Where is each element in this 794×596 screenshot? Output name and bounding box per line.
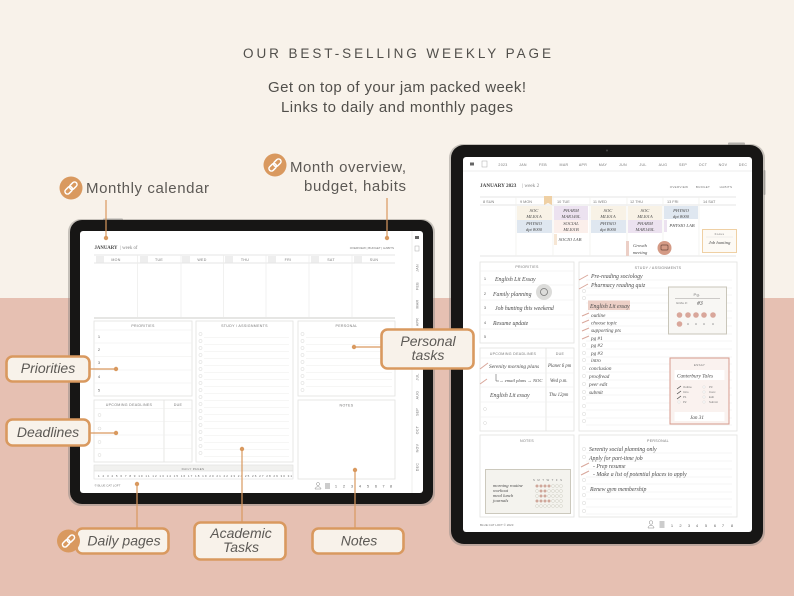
right footer: 4 — [696, 523, 699, 528]
callout: academic tasks: Tasks — [223, 539, 259, 555]
left screen — [80, 231, 423, 493]
right week calendar: MAR140L — [635, 227, 655, 232]
right personal panel: Serenity social planning only — [589, 447, 657, 453]
right week calendar: 13 FRI — [667, 200, 678, 204]
left notes panel: NOTES — [340, 404, 354, 408]
subtitle — [268, 79, 526, 116]
right footer: 6 — [714, 523, 717, 528]
left page title: JANUARY — [94, 246, 118, 251]
right week calendar: PHYSIO — [672, 208, 690, 213]
right top links: OVERVIEW — [670, 185, 688, 189]
left priorities panel: 4 — [98, 374, 101, 379]
habit tracker card — [486, 470, 570, 514]
right week calendar: 12 THU — [630, 200, 643, 204]
right week calendar: PHYSIO — [599, 221, 617, 226]
left week calendar: SAT — [327, 258, 335, 262]
callout: monthly calendar — [60, 176, 209, 240]
right study panel — [579, 262, 737, 431]
left week calendar: THU — [241, 258, 249, 262]
left week calendar — [94, 255, 395, 319]
right priorities panel: English Lit Essay — [494, 277, 536, 283]
right study panel: pg #3 — [590, 351, 603, 357]
left priorities panel: 5 — [98, 388, 101, 392]
right week calendar: MLI01A — [525, 214, 542, 219]
left daily pages strip: 1 2 3 4 5 6 7 8 9 10 11 12 13 14 15 16 17 18 19 20 21 22 23 24 25 26 27 28 29 30 31 — [98, 474, 292, 478]
left daily pages strip: DAILY PAGES — [182, 467, 204, 471]
right study panel: pg #1 — [590, 336, 603, 342]
right personal panel: Apply for part-time job — [588, 455, 643, 462]
left week calendar: TUE — [155, 258, 163, 262]
page goal card: Pg. — [694, 292, 700, 297]
callout: academic tasks — [194, 447, 286, 560]
left month tabs — [415, 236, 420, 471]
essay card: P1 — [683, 395, 687, 399]
left priorities panel: 3 — [98, 360, 101, 365]
left month tabs: SEP — [416, 408, 420, 416]
callout: deadlines — [6, 420, 118, 446]
left month tabs: APR — [416, 318, 420, 326]
right nav bar: SEP — [679, 163, 687, 167]
left footer: 6 — [375, 484, 378, 488]
right footer: 7 — [722, 523, 725, 528]
right week calendar: 8 SUN — [483, 200, 494, 204]
left month tabs: NOV — [416, 443, 420, 452]
page goal card: #3 — [697, 301, 703, 307]
left priorities panel — [94, 321, 192, 396]
right week calendar: 9 MON — [520, 200, 532, 204]
left footer: © BLUE CAT LOFT — [94, 484, 121, 488]
page goal card — [668, 287, 726, 334]
right study panel: conclusion — [589, 366, 612, 372]
sticky note: Focus — [715, 232, 725, 236]
right deadlines panel — [480, 348, 574, 431]
left deadlines panel: DUE — [174, 403, 183, 407]
left study panel: STUDY / ASSIGNMENTS — [221, 324, 268, 328]
right week calendar: 10 TUE — [557, 200, 570, 204]
left week calendar: FRI — [285, 258, 291, 262]
habit tracker card: meal lunch — [493, 493, 514, 498]
left tablet — [68, 218, 435, 506]
left month tabs: JAN — [416, 264, 420, 272]
right study panel: English Lit essay — [589, 304, 630, 310]
right priorities panel: 2 — [484, 291, 487, 296]
right week calendar: SOC — [641, 208, 650, 213]
left month tabs: AUG — [416, 391, 420, 399]
left personal panel — [298, 321, 395, 396]
essay card: Submit — [709, 400, 718, 404]
essay card — [670, 358, 729, 424]
right deadlines panel: Planet 6 pm — [547, 364, 572, 369]
right week calendar: SOC — [530, 208, 539, 213]
heading: OUR BEST-SELLING WEEKLY PAGE — [243, 46, 551, 61]
right week calendar: dpt 8000 — [526, 227, 543, 232]
right tablet — [449, 142, 766, 546]
right deadlines panel: Thu 12pm — [549, 393, 569, 398]
right priorities panel: Family planning — [492, 292, 532, 298]
right footer: 3 — [688, 523, 691, 528]
essay card: Canterbury Tales — [677, 374, 713, 380]
left daily pages strip — [94, 465, 293, 479]
callout: priorities: Priorities — [21, 360, 75, 376]
right week calendar: SOCIO LAB — [559, 237, 582, 242]
essay card: P2 — [683, 400, 687, 404]
right personal panel — [579, 435, 737, 517]
left priorities panel: PRIORITIES — [131, 324, 155, 328]
right top links: BUDGET — [696, 185, 710, 189]
essay card: ESSAY — [694, 363, 705, 367]
callout: month overview: Month overview, — [290, 159, 406, 176]
right deadlines panel: → email plans → NOC — [499, 378, 543, 383]
right study panel: submit — [589, 390, 603, 396]
callout: priorities — [6, 356, 118, 382]
icon: link — [60, 176, 82, 200]
bookmark — [544, 196, 552, 205]
right footer: 2 — [679, 523, 682, 528]
meeting icon — [658, 241, 672, 255]
callout: month overview — [264, 154, 406, 240]
left month tabs: MAR — [416, 299, 420, 308]
left priorities panel: 2 — [98, 347, 101, 352]
right deadlines panel: English Lit essay — [489, 393, 530, 399]
right nav bar: JUL — [639, 163, 647, 167]
right week calendar: PHYSIO LAB — [668, 223, 695, 228]
right priorities panel: 3 — [484, 305, 487, 310]
habit tracker card: morning routine — [493, 483, 523, 488]
right nav bar: NOV — [719, 163, 728, 167]
right personal panel: - Make a list of potential places to apply — [593, 471, 687, 478]
right week calendar: MLI01A — [636, 214, 653, 219]
left footer — [94, 482, 393, 489]
right page title — [480, 183, 540, 189]
callout: monthly calendar: Monthly calendar — [86, 180, 209, 197]
left priorities panel: 1 — [98, 334, 101, 339]
subtitle: Get on top of your jam packed week! — [268, 79, 526, 96]
right study panel: intro — [591, 358, 601, 364]
right week calendar: PHARM — [562, 208, 580, 213]
left footer: 3 — [351, 484, 354, 488]
right study panel: proofread — [588, 373, 610, 380]
left deadlines panel: UPCOMING DEADLINES — [106, 403, 153, 407]
essay card: Jan 31 — [690, 415, 704, 421]
left page title — [94, 246, 138, 251]
right priorities panel: Job hunting this weekend — [495, 306, 554, 312]
callout: academic tasks: Academic — [209, 525, 272, 541]
left footer: 5 — [367, 484, 370, 488]
right study panel: peer edit — [588, 382, 608, 388]
right priorities panel: Resume update — [492, 321, 529, 327]
right top links — [670, 185, 732, 189]
callout: notes — [312, 468, 404, 554]
right week calendar: meeting — [633, 250, 648, 255]
right page title: JANUARY 2023 — [480, 183, 517, 189]
right nav bar: MAR — [560, 163, 569, 167]
right deadlines panel: Serenity morning plans — [489, 364, 539, 370]
right screen — [463, 157, 752, 532]
left page title: | week of — [120, 246, 138, 251]
right footer — [480, 521, 734, 528]
right deadlines panel: DUE — [556, 352, 565, 356]
right nav bar — [463, 161, 752, 171]
left month tabs: DEC — [416, 463, 420, 471]
callout: personal tasks — [352, 330, 474, 368]
left month tabs: MAY — [416, 335, 420, 344]
right study panel: Pre-reading sociology — [590, 274, 643, 280]
right nav bar: APR — [579, 163, 587, 167]
right week calendar: Growth — [633, 243, 648, 248]
left week calendar: SUN — [370, 258, 378, 262]
right top links: HABITS — [720, 185, 732, 189]
right study panel: STUDY / ASSIGNMENTS — [635, 266, 682, 270]
right study panel: Pharmacy reading quiz — [590, 283, 646, 289]
right week calendar: 11 WED — [593, 200, 607, 204]
right deadlines panel: Wed p.m. — [550, 379, 568, 384]
left footer: 7 — [382, 484, 385, 488]
callout: notes: Notes — [341, 532, 377, 548]
right nav bar: JUN — [619, 163, 627, 167]
right footer: 5 — [705, 523, 708, 528]
left week calendar: WED — [197, 258, 207, 262]
left week calendar: MON — [111, 258, 121, 262]
left footer: 2 — [343, 484, 346, 488]
left deadlines panel — [94, 400, 192, 462]
right footer: BLUE CAT LOFT © 2023 — [480, 523, 514, 527]
left month tabs: FEB — [416, 282, 420, 290]
right week calendar: dpt 8000 — [673, 214, 690, 219]
right nav bar: FEB — [539, 163, 547, 167]
essay card: Conc — [709, 390, 716, 394]
right week calendar — [480, 196, 736, 256]
clock icon — [536, 284, 552, 300]
right study panel: supporting pts — [591, 328, 621, 334]
right personal panel: - Prep resume — [593, 464, 626, 470]
essay card: Edit — [709, 395, 714, 399]
icon: link — [57, 530, 80, 552]
right priorities panel: 4 — [484, 320, 487, 325]
right week calendar: PHARM — [636, 221, 654, 226]
callout: personal tasks: tasks — [412, 347, 444, 363]
habit tracker card: workout — [493, 488, 509, 493]
right nav bar: OCT — [699, 163, 708, 167]
right footer: 1 — [671, 523, 674, 528]
left footer: 4 — [359, 484, 362, 488]
right nav bar: 2023 — [498, 163, 508, 167]
left footer: 8 — [390, 484, 393, 488]
right personal panel: Renew gym membership — [589, 487, 646, 493]
left month tabs: JUN — [416, 354, 420, 362]
right study panel: outline — [591, 313, 606, 319]
right week calendar: SOCIAL — [563, 221, 579, 226]
right nav bar: MAY — [599, 163, 608, 167]
habit tracker card: S M T W T F S — [533, 478, 562, 482]
callout: personal tasks: Personal — [400, 333, 457, 349]
callout: daily pages — [57, 482, 168, 554]
left notes panel — [298, 400, 395, 479]
right week calendar: SOC — [604, 208, 613, 213]
left footer: 1 — [335, 484, 338, 488]
left month tabs: OCT — [416, 425, 420, 434]
right week calendar: MLI01B — [562, 227, 579, 232]
right notes panel — [480, 435, 574, 517]
right deadlines panel: UPCOMING DEADLINES — [490, 352, 537, 356]
right week calendar: MLI01A — [599, 214, 616, 219]
right page title: | week 2 — [522, 183, 540, 189]
right week calendar: MAR140L — [561, 214, 581, 219]
left personal panel: PERSONAL — [336, 324, 357, 328]
right priorities panel: PRIORITIES — [515, 265, 539, 269]
right study panel: choose topic — [591, 320, 618, 326]
habit tracker card: journals — [492, 498, 509, 503]
right priorities panel: 5 — [484, 334, 487, 339]
right nav bar: JAN — [519, 163, 527, 167]
right week calendar: dpt 8000 — [600, 227, 617, 232]
left month tabs: JUL — [416, 373, 420, 381]
callout: deadlines: Deadlines — [17, 424, 79, 440]
essay card: P3 — [709, 385, 713, 389]
essay card: Outline — [683, 385, 692, 389]
sticky note — [702, 230, 736, 252]
right week calendar: 14 SAT — [703, 200, 716, 204]
right notes panel: NOTES — [520, 439, 534, 443]
sticky note: Job hunting — [709, 240, 731, 245]
essay card: Intro — [683, 390, 689, 394]
right week calendar: PHYSIO — [525, 221, 543, 226]
right footer: 8 — [731, 523, 734, 528]
page goal card: GOAL #: — [676, 301, 688, 305]
right personal panel: PERSONAL — [647, 439, 669, 443]
right priorities panel — [480, 262, 574, 343]
right nav bar: AUG — [659, 163, 667, 167]
callout: daily pages: Daily pages — [87, 532, 161, 548]
callout: month overview: budget, habits — [304, 178, 406, 195]
left study panel — [196, 321, 293, 462]
left top links: OVERVIEW | BUDGET | HABITS — [350, 246, 394, 250]
subtitle: Links to daily and monthly pages — [281, 99, 513, 116]
right priorities panel: 1 — [484, 276, 487, 281]
icon: link — [264, 154, 286, 176]
right study panel: pg #2 — [590, 343, 603, 349]
right nav bar: DEC — [739, 163, 747, 167]
